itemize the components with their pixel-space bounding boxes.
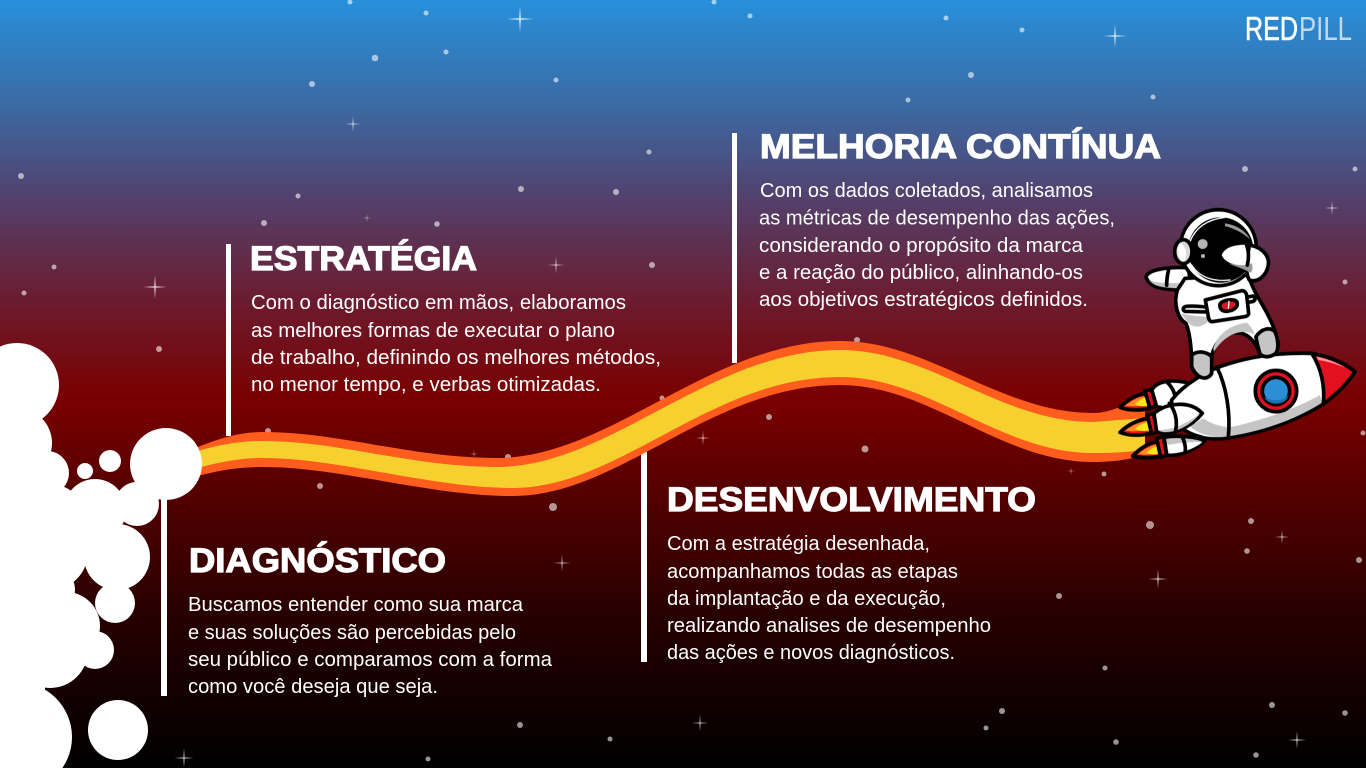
text: diagnostico: seu público e comparamos com a forma — [188, 649, 553, 671]
text: diagnostico: Buscamos entender como sua marca — [188, 594, 524, 616]
cloud of white bubbles — [0, 343, 202, 768]
text: desenvolvimento: acompanhamos todas as etapas — [667, 561, 958, 583]
text: melhoria continua: as métricas de desempenho das ações, — [759, 208, 1115, 230]
rocket centre fin — [1154, 404, 1202, 433]
astronaut raised arm — [1246, 245, 1268, 281]
text: melhoria continua: Com os dados coletados, analisamos — [760, 180, 1093, 202]
flame ribbon — [198, 341, 1145, 496]
logo: Redpill — [1245, 10, 1352, 47]
text: melhoria continua: considerando o propósito da marca — [759, 235, 1084, 257]
astronaut chest pack — [1205, 291, 1249, 322]
rocket nozzles and rear engines — [1145, 381, 1205, 457]
text: diagnostico: e suas soluções são percebidas pelo — [188, 622, 516, 644]
heading: desenvolvimento: DESENVOLVIMENTO — [667, 481, 1036, 519]
logo: Redpill: RED — [1245, 10, 1298, 47]
heading: diagnostico: DIAGNÓSTICO — [189, 542, 446, 580]
text: melhoria continua: e a reação do público, alinhando-os — [759, 262, 1083, 284]
logo: Redpill: PILL — [1299, 10, 1352, 47]
block: estrategia — [250, 240, 661, 396]
text: estrategia — [251, 292, 661, 396]
text: desenvolvimento — [667, 533, 991, 664]
text: diagnostico — [188, 594, 553, 698]
astronaut headphone — [1175, 240, 1192, 264]
text: estrategia: de trabalho, definindo os melhores métodos, — [251, 347, 661, 369]
text: desenvolvimento: Com a estratégia desenhada, — [667, 533, 930, 555]
text: estrategia: as melhores formas de executar o plano — [251, 320, 615, 342]
block: desenvolvimento — [667, 481, 1036, 664]
astronaut arm — [1146, 267, 1192, 291]
heading: melhoria continua: MELHORIA CONTÍNUA — [760, 128, 1161, 166]
heading: estrategia: ESTRATÉGIA — [250, 240, 477, 278]
text: desenvolvimento: da implantação e da execução, — [667, 588, 946, 610]
astronaut helmet — [1180, 210, 1256, 286]
text: melhoria continua: aos objetivos estratégicos definidos. — [759, 289, 1088, 311]
text: estrategia: Com o diagnóstico em mãos, elaboramos — [251, 292, 626, 314]
text: desenvolvimento: realizando analises de desempenho — [667, 615, 991, 637]
text: diagnostico: como você deseja que seja. — [188, 676, 438, 698]
rocket flames — [1120, 393, 1162, 458]
block: melhoria continua — [759, 128, 1161, 311]
astronaut belt — [1183, 306, 1208, 312]
timeline divider bars — [161, 133, 737, 696]
astronaut — [1146, 210, 1278, 378]
block: diagnostico — [188, 542, 553, 698]
rocket with astronaut — [1120, 210, 1355, 458]
text: estrategia: no menor tempo, e verbas otimizadas. — [251, 374, 601, 396]
rocket body — [1172, 353, 1355, 439]
astronaut torso and legs — [1176, 275, 1278, 378]
text: desenvolvimento: das ações e novos diagnósticos. — [667, 642, 955, 664]
text: melhoria continua — [759, 180, 1115, 311]
